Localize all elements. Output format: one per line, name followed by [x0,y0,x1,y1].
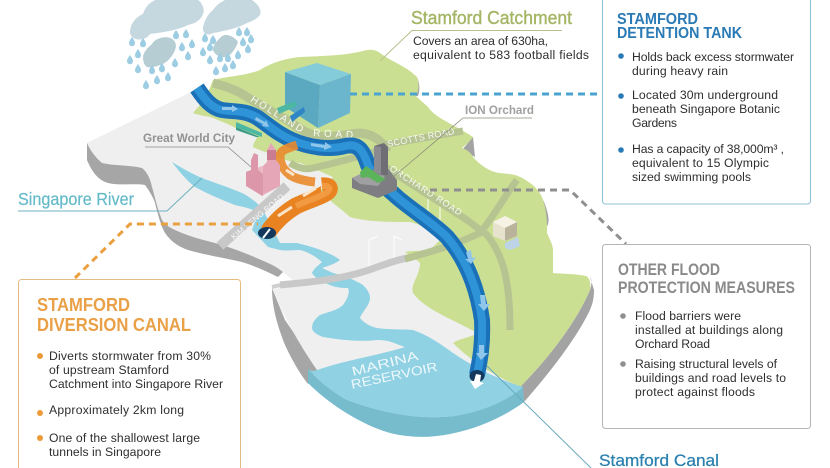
body text: protect against floods [635,385,755,399]
leader: stamford canal [487,366,591,468]
heading [617,11,743,42]
label: stamford catchment: equivalent to 583 football fields [413,48,589,62]
green land surface [193,50,590,387]
connector: diversion canal dashes [75,224,258,278]
great world city building [246,143,280,196]
body text: Raising structural levels of [635,357,778,371]
body text: during heavy rain [632,64,728,78]
land side edge [87,143,318,384]
rain clouds [127,0,261,89]
label: marina reservoir: RESERVOIR [350,359,439,392]
bullets [620,313,626,367]
label: great world city [143,131,251,167]
singapore river [172,162,453,353]
map: land and water [87,50,594,437]
heading: DETENTION TANK [617,25,743,42]
label: singapore river [18,178,202,211]
grey land surface [87,91,520,400]
icon: rain drops [127,27,254,89]
road labels: ROAD [313,128,353,141]
body text [49,349,223,459]
heading: STAMFORD [37,295,130,315]
body text: Holds back excess stormwater [632,50,794,64]
reservoir front [308,369,524,437]
connector: other measures dashes [430,190,626,244]
icon: cloud left small [143,37,176,67]
body text: Catchment into Singapore River [49,377,223,391]
body text: Approximately 2km long [49,403,184,417]
label: marina reservoir [350,348,439,392]
icon: cloud right small [213,35,238,57]
body text: Has a capacity of 38,000m³ , [632,142,784,156]
body text: Gardens [632,116,677,130]
label: stamford catchment: Covers an area of 630ha, [413,34,548,48]
body text: sized swimming pools [632,170,751,184]
icon: cloud right [203,0,261,34]
canal arrows [222,105,490,360]
label: ion orchard: ION Orchard [465,105,534,117]
body text: One of the shallowest large [49,431,200,445]
body text: installed at buildings along [635,323,783,337]
label: great world city: Great World City [143,131,235,145]
heading: STAMFORD [617,11,698,28]
green land side [371,53,594,402]
body text: Orchard Road [635,337,710,351]
body text: tunnels in Singapore [49,445,161,459]
ion orchard building [352,143,397,198]
road labels: KIM SENG ROAD [230,192,286,242]
heading [618,261,795,297]
stamford canal: blue channel [197,88,482,375]
road labels: HOLLAND [248,94,305,135]
panel: stamford detention tank [602,0,810,204]
label: singapore river: Singapore River [18,189,134,209]
body text: Diverts stormwater from 30% [49,349,211,363]
connector: detention tank dashes [350,92,602,96]
body text: buildings and road levels to [635,371,786,385]
road strip on land edge [272,282,300,287]
roads [213,83,517,330]
bullets [37,353,43,441]
small building [493,216,520,250]
heading [37,295,191,335]
body text: Located 30m underground [632,88,778,102]
body text: beneath Singapore Botanic [632,102,780,116]
label: stamford catchment [380,8,589,62]
road labels: ORCHARD ROAD [388,163,464,218]
body text: of upstream Stamford [49,363,169,377]
bullets [618,53,624,153]
body text [635,309,786,399]
panel: other flood protection measures [602,244,810,428]
panel: stamford diversion canal [18,280,240,468]
heading: PROTECTION MEASURES [618,279,795,297]
body text: equivalent to 15 Olympic [632,156,769,170]
label: ion orchard [392,105,534,178]
body text: Flood barriers were [635,309,741,323]
detention tank [236,63,351,137]
heading: OTHER FLOOD [618,261,720,279]
diversion canal [258,145,329,239]
faint building outlines [369,190,440,272]
road labels: SCOTTS ROAD [386,126,456,149]
label: marina reservoir: MARINA [350,348,420,379]
heading: DIVERSION CANAL [37,315,191,335]
reservoir surface [308,330,523,417]
road labels [230,94,464,242]
label: stamford catchment: Stamford Catchment [411,8,572,28]
icon: cloud left [130,0,204,40]
body text [632,50,794,184]
canal outlet [470,370,484,389]
